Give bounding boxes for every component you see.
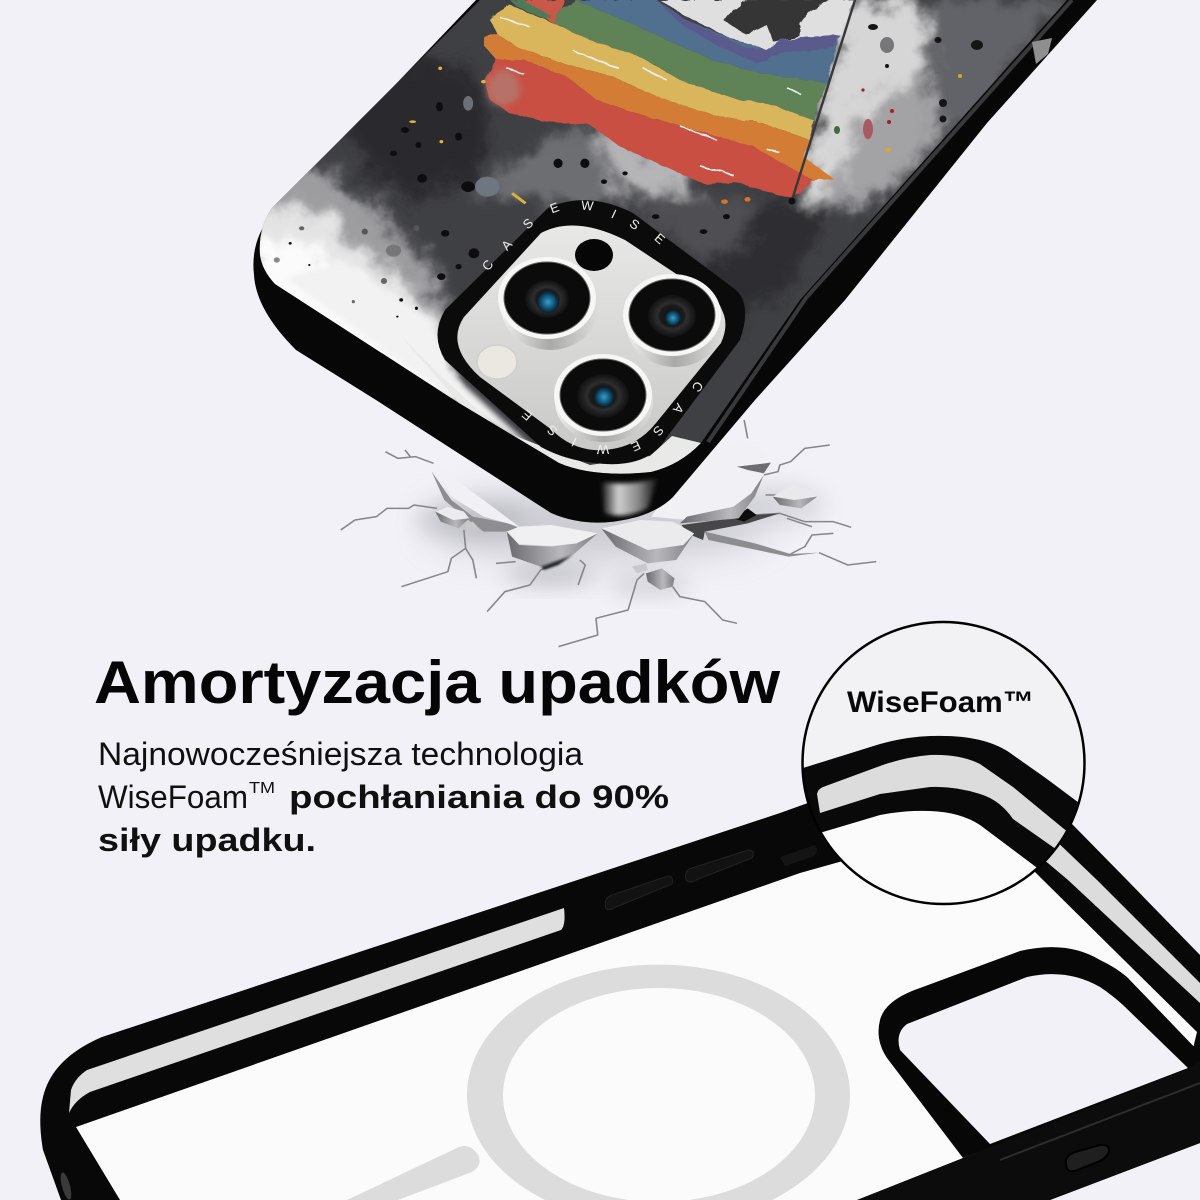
magnifier callout [801, 620, 1086, 906]
paint speckles [274, 67, 751, 318]
MagSafe alignment tab [347, 1146, 480, 1200]
soft shadow around impact [415, 485, 825, 597]
CASEWISE branding on ring, upper: I [609, 206, 619, 221]
foam channel, short side [1030, 835, 1200, 1003]
description text: siły upadku. [98, 822, 316, 858]
CASEWISE branding on ring, upper: S [627, 216, 643, 233]
CASEWISE branding on ring, lower: S [544, 422, 560, 439]
watercolor clouds [250, 0, 1070, 420]
CASEWISE branding on ring, upper [479, 198, 668, 274]
CASEWISE branding on ring, upper: W [581, 198, 595, 214]
CASEWISE branding on ring, lower: A [670, 401, 687, 417]
camera cutout ring [438, 200, 745, 464]
back print: watercolor art [250, 0, 1080, 490]
CASEWISE branding on ring, lower: S [650, 423, 667, 439]
heading: Amortyzacja upadków [94, 649, 780, 716]
CASEWISE branding on ring, lower: C [689, 378, 706, 395]
description text: Najnowocześniejsza technologia [98, 736, 583, 772]
CASEWISE branding on ring, upper: S [520, 215, 536, 232]
corner reflection [601, 478, 658, 516]
CASEWISE branding on ring, lower: I [569, 435, 579, 450]
side button [1032, 38, 1052, 64]
CASEWISE branding on ring, lower: E [629, 437, 643, 455]
CASEWISE branding on ring, lower: W [596, 442, 609, 457]
case outer shell [253, 0, 1097, 523]
camera cutout frame [879, 947, 1200, 1158]
silver camera plate [457, 225, 725, 450]
flag pole [792, 0, 855, 200]
circle outline [802, 622, 1084, 904]
description text: TM [249, 780, 275, 797]
top phone in black case [250, 0, 1097, 523]
flash [477, 345, 517, 379]
crack lines and rubble [341, 420, 876, 647]
paint speckles right of pole [834, 24, 983, 152]
lens 2 [623, 274, 724, 367]
case rim highlight [708, 0, 1072, 442]
CASEWISE branding on ring, upper: E [652, 230, 668, 247]
black frame [40, 766, 1200, 1200]
MagSafe ring [467, 965, 850, 1200]
charging port [1066, 1145, 1109, 1171]
frame highlight [1000, 1083, 1200, 1160]
lens 1 [498, 257, 599, 350]
foam channel, long side [69, 908, 565, 1113]
camera cutout opening [899, 974, 1188, 1144]
description text: WiseFoam [98, 779, 248, 815]
side buttons [605, 850, 753, 910]
circle fill [802, 622, 1084, 904]
magnified foam detail [804, 736, 1078, 902]
description text [98, 736, 669, 858]
microphone hole [575, 239, 613, 271]
bottom clear case [40, 766, 1200, 1200]
speaker opening [59, 1171, 73, 1200]
CASEWISE branding on ring, upper: A [498, 237, 515, 253]
clear back panel [76, 845, 1197, 1200]
CASEWISE branding on ring, lower [519, 378, 706, 457]
white strip below camera ring [400, 335, 701, 474]
CASEWISE branding on ring, upper: C [479, 257, 496, 274]
lens 3 [554, 354, 653, 442]
callout label: WiseFoam™ [847, 686, 1034, 719]
cracked surface impact [341, 420, 876, 647]
description text: pochłaniania do 90% [289, 779, 669, 815]
rainbow flag [485, 0, 853, 198]
white area left of camera ring [296, 274, 536, 450]
lower frame band [857, 1060, 1200, 1200]
lower edge controls [780, 845, 817, 866]
CASEWISE branding on ring, upper: E [548, 199, 561, 216]
CASEWISE branding on ring, lower: E [519, 407, 535, 424]
